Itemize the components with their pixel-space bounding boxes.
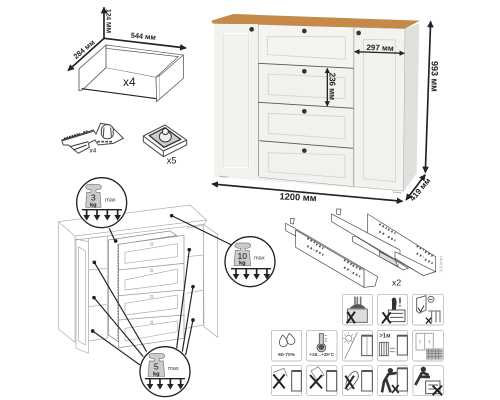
weight badge: 10 kg max: max — [254, 256, 265, 262]
icon: temperature +18...+25°C — [307, 330, 337, 361]
quantity x4: x4 — [123, 75, 136, 89]
label x5: x5 — [167, 155, 177, 165]
runner length note: 300mm — [438, 256, 444, 273]
weight badge: 5 kg max: max — [168, 366, 179, 372]
open cabinet line drawing — [58, 205, 218, 353]
icon: humidity 60-70% — [271, 330, 302, 361]
weight badge: 3 kg max: max — [105, 197, 116, 203]
dimension: drawer height 236 mm: 236 мм — [327, 73, 336, 100]
icon: person climbing on furniture — [413, 366, 443, 396]
icon: person pushing cabinet — [377, 366, 408, 396]
weight badge: 5 kg max: 5 — [154, 362, 159, 372]
icon: no climbing — [377, 294, 408, 325]
drawer fronts — [258, 25, 354, 187]
icon: window and radiator grid — [413, 330, 443, 361]
leader dots — [91, 214, 195, 333]
icon: no heavy load on top — [342, 294, 373, 325]
icon: no tilting (1) — [271, 366, 302, 396]
weight badge: 3 kg max — [77, 178, 127, 228]
front carcass — [214, 23, 405, 192]
sideboard photo — [211, 14, 440, 203]
dimension: door width 297 mm — [355, 43, 404, 53]
left runner — [286, 218, 378, 287]
runner holes — [307, 224, 433, 277]
load diagram — [58, 178, 275, 397]
icon: avoid direct sunlight — [342, 330, 373, 361]
weight badge: 10 kg max: 10 — [237, 251, 247, 261]
right door — [354, 27, 405, 191]
right runner — [332, 209, 436, 276]
label x4: x4 — [89, 148, 97, 155]
weight badge: 5 kg max: kg — [153, 371, 160, 377]
icon: keep over 1 m from heater — [377, 330, 408, 361]
dimension: width 1200 mm: 1200 мм — [279, 191, 317, 203]
dimension: door width 297 mm: 297 мм — [366, 43, 394, 53]
hinge hardware x4 — [62, 123, 123, 155]
knobs — [249, 27, 361, 153]
weight badge: 10 kg max: kg — [239, 261, 246, 267]
weight badge: 10 kg max — [225, 237, 275, 287]
cam fitting x5 — [143, 125, 187, 165]
icon: no leaning objects — [342, 366, 373, 396]
icon: temperature +18...+25°C: +18...+25°C — [309, 352, 335, 357]
dimension: height 993 mm — [425, 21, 440, 173]
dimension: height 993 mm: 993 мм — [430, 61, 440, 92]
weight badge: 3 kg max: 3 — [91, 193, 96, 203]
care and usage pictograms — [271, 294, 443, 396]
weight badge: 5 kg max — [140, 347, 190, 397]
left door — [214, 24, 258, 177]
dimension: depth 284 mm: 284 мм — [71, 38, 97, 61]
label x2: x2 — [392, 278, 401, 288]
drawer runners x2 — [286, 209, 444, 288]
drawer outline — [79, 45, 183, 102]
weight badge: 3 kg max: kg — [90, 202, 97, 208]
icon: door alignment check — [413, 294, 443, 325]
side panel — [403, 23, 419, 192]
drawer box with dimensions — [68, 7, 186, 102]
leader lines — [93, 216, 232, 365]
icon: no tilting (2) — [307, 366, 337, 396]
dimension: depth 419 mm: 419 мм — [408, 176, 432, 203]
dimension: width 1200 mm — [212, 184, 403, 203]
icon: humidity 60-70%: 60-70% — [278, 352, 296, 358]
dimension: height 124 mm: 124 ММ — [105, 9, 112, 33]
feet — [219, 176, 402, 193]
icon: keep over 1 m from heater: >1м — [379, 334, 391, 340]
oak worktop — [211, 14, 420, 29]
dimension: width 544 mm: 544 мм — [130, 31, 156, 42]
